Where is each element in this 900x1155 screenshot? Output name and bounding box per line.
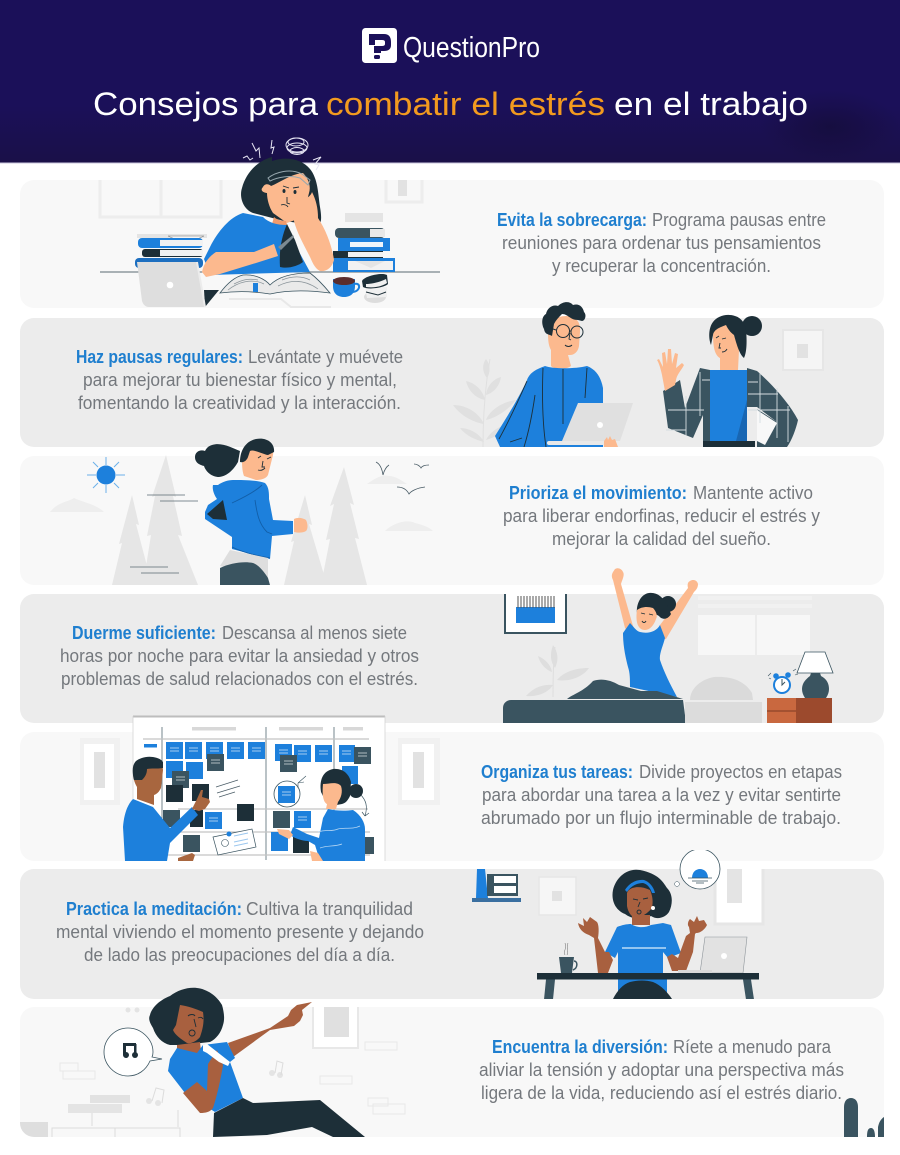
lamp	[797, 652, 833, 698]
text: prioriza el movimiento: mejorar la calidad del sueño.	[552, 529, 771, 549]
text: practica la meditación: Cultiva la tranquilidad	[246, 899, 413, 919]
illustration: two people at a kanban board	[80, 716, 440, 861]
text: evita la sobrecarga: Programa pausas entre	[652, 210, 826, 230]
illustration: woman singing and pointing	[20, 988, 884, 1137]
header banner	[0, 0, 900, 164]
wall frames	[539, 869, 763, 924]
text: encuentra la diversión: Ríete a menudo para	[673, 1037, 832, 1057]
title: Consejos para	[93, 86, 318, 122]
wall frame left	[80, 738, 120, 805]
panel: evita la sobrecarga	[20, 138, 884, 308]
clouds	[50, 475, 433, 531]
board	[133, 716, 385, 861]
icon: logo mark	[362, 28, 397, 63]
stress scribble and lightning	[243, 138, 321, 170]
text: practica la meditación	[56, 899, 424, 965]
title	[93, 86, 808, 122]
open book	[220, 273, 331, 307]
blanket	[567, 680, 683, 699]
framed picture	[505, 594, 566, 633]
text: practica la meditación: Practica la meditación:	[66, 899, 242, 919]
woman	[277, 769, 365, 861]
motion lines	[130, 495, 198, 573]
text: duerme suficiente: Descansa al menos siete	[222, 623, 407, 643]
man	[495, 302, 633, 447]
wall switch	[783, 330, 823, 370]
faint room background	[20, 1007, 405, 1137]
nightstand	[767, 698, 832, 723]
wall frame right	[398, 738, 440, 805]
cactus	[844, 1098, 884, 1137]
plant	[526, 645, 589, 697]
text: duerme suficiente: problemas de salud relacionados con el estrés.	[61, 669, 418, 689]
panel: haz pausas regulares	[20, 302, 884, 447]
title: en el trabajo	[614, 86, 808, 122]
text: duerme suficiente: horas por noche para evitar la ansiedad y otros	[60, 646, 419, 666]
panel: prioriza el movimiento	[50, 438, 820, 585]
photo card	[213, 829, 256, 855]
text: duerme suficiente: Duerme suficiente:	[72, 623, 216, 643]
woman stretching	[612, 568, 698, 697]
alarm clock	[768, 669, 798, 693]
birds	[376, 462, 429, 494]
illustration: stressed woman at desk	[100, 138, 440, 307]
illustration: woman meditating at desk	[472, 849, 763, 1000]
panel: encuentra la diversión	[20, 988, 884, 1137]
illustration: woman waking up in bed	[503, 568, 833, 723]
text: haz pausas regulares	[76, 347, 403, 413]
text: practica la meditación: de lado las preocupaciones del día a día.	[84, 945, 395, 965]
text: encuentra la diversión: ligera de la vida, reduciendo así el estrés diario.	[481, 1083, 842, 1103]
text: practica la meditación: mental viviendo el momento presente y dejando	[56, 922, 424, 942]
text: prioriza el movimiento: Prioriza el movimiento:	[509, 483, 687, 503]
panel: organiza tus tareas	[20, 716, 884, 861]
desk	[537, 973, 759, 1000]
laptop	[137, 262, 219, 307]
pillow	[690, 677, 753, 700]
text: evita la sobrecarga: reuniones para ordenar tus pensamientos	[502, 233, 821, 253]
runner	[195, 439, 308, 585]
coffee mug with steam	[559, 943, 577, 973]
right books	[333, 213, 395, 272]
woman	[202, 157, 334, 277]
panel: practica la meditación	[20, 849, 884, 1000]
music bubble	[104, 1028, 162, 1076]
left books	[135, 234, 207, 268]
woman	[149, 988, 365, 1137]
laptop	[678, 937, 747, 973]
text: organiza tus tareas: Divide proyectos en etapas	[639, 762, 842, 782]
woman waving	[657, 315, 798, 447]
legs	[613, 980, 672, 999]
thought bubble	[675, 849, 720, 889]
text: prioriza el movimiento: Mantente activo	[693, 483, 813, 503]
text: organiza tus tareas: para abordar una tarea a la vez y evitar sentirte	[482, 785, 841, 805]
text: haz pausas regulares: para mejorar tu bienestar físico y mental,	[83, 370, 397, 390]
text: haz pausas regulares: fomentando la creatividad y la interacción.	[78, 393, 401, 413]
text: haz pausas regulares: Haz pausas regulares:	[76, 347, 243, 367]
bed	[503, 700, 762, 723]
text: encuentra la diversión: Encuentra la diversión:	[492, 1037, 668, 1057]
window	[698, 596, 812, 655]
text: evita la sobrecarga	[497, 210, 826, 276]
panel: duerme suficiente	[20, 568, 884, 723]
trees	[112, 455, 367, 585]
illustration: two coworkers talking	[453, 302, 823, 447]
text: organiza tus tareas: abrumado por un flujo interminable de trabajo.	[481, 808, 841, 828]
illustration: woman running outdoors	[50, 439, 433, 585]
man	[123, 757, 210, 861]
text: organiza tus tareas	[481, 762, 842, 828]
text: evita la sobrecarga: Evita la sobrecarga:	[497, 210, 647, 230]
logo wordmark: QuestionPro	[403, 32, 540, 64]
text: prioriza el movimiento	[503, 483, 820, 549]
text: encuentra la diversión	[479, 1037, 844, 1103]
text: haz pausas regulares: Levántate y muévete	[248, 347, 403, 367]
text: encuentra la diversión: aliviar la tensión y adoptar una perspectiva más	[479, 1060, 844, 1080]
sun	[87, 457, 125, 493]
woman	[578, 870, 707, 992]
logo: QuestionPro	[362, 28, 540, 64]
title: combatir el estrés	[326, 86, 605, 122]
text: evita la sobrecarga: y recuperar la concentración.	[552, 256, 771, 276]
coffee mug	[333, 277, 359, 297]
stacked cups	[362, 274, 388, 303]
text: prioriza el movimiento: para liberar endorfinas, reducir el estrés y	[503, 506, 820, 526]
text: organiza tus tareas: Organiza tus tareas:	[481, 762, 633, 782]
text: duerme suficiente	[60, 623, 419, 689]
binders	[472, 869, 521, 902]
plant	[453, 359, 516, 447]
